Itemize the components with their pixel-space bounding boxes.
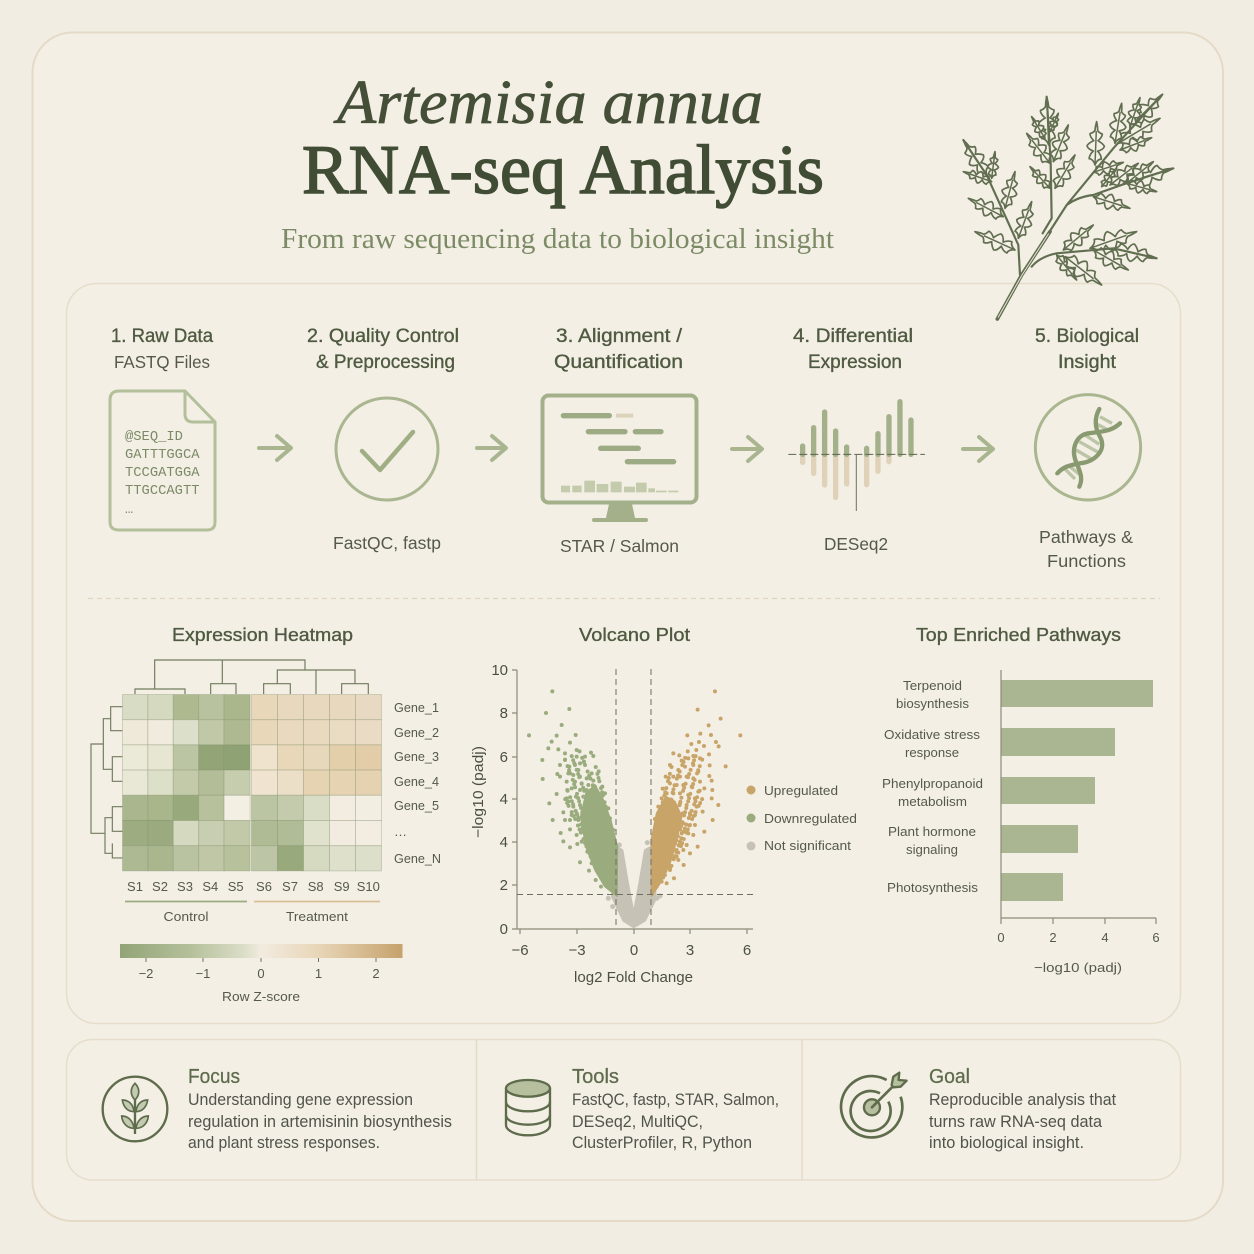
gene labels: Gene_3	[394, 749, 439, 764]
gene labels: Gene_4	[394, 774, 439, 789]
pathway labels: Oxidative stress	[884, 727, 981, 742]
goal block	[841, 1066, 1116, 1152]
tools block: FastQC, fastp, STAR, Salmon,	[572, 1091, 779, 1109]
volcano heading: Volcano Plot	[579, 624, 690, 645]
axis labels: −log10 (padj)	[470, 746, 487, 838]
icon: check circle	[336, 398, 438, 500]
icon: FASTQ file: …	[125, 503, 133, 518]
arrow 1 to 2	[259, 436, 291, 460]
legend: Upregulated	[764, 783, 838, 798]
sample labels: S8	[308, 879, 324, 894]
axis labels: 10	[491, 662, 508, 679]
scatter points	[529, 691, 740, 927]
step 5: biological insight	[1035, 326, 1141, 571]
pathway labels: Plant hormone	[888, 824, 976, 839]
icon: artemisia sprig	[956, 88, 1176, 319]
step 4: differential expression: DESeq2	[824, 534, 888, 554]
x axis labels: 2	[1049, 930, 1057, 945]
group labels	[125, 902, 380, 924]
volcano plot	[470, 662, 857, 986]
axis labels: 6	[500, 749, 508, 766]
x axis labels: 4	[1101, 930, 1109, 945]
tools block: DESeq2, MultiQC,	[572, 1113, 703, 1131]
goal block: Goal	[929, 1066, 970, 1088]
color scale: −2	[139, 966, 153, 981]
arrow 2 to 3	[477, 436, 506, 460]
step 1: raw data: 1. Raw Data	[111, 326, 213, 347]
goal block: turns raw RNA-seq data	[929, 1113, 1103, 1131]
pathway labels: Phenylpropanoid	[882, 776, 983, 791]
axis labels: −3	[568, 942, 586, 959]
sample labels: S3	[177, 879, 193, 894]
icon: DNA helix	[1035, 395, 1141, 500]
heatmap cells	[122, 694, 382, 871]
gene labels: Gene_2	[394, 725, 439, 740]
gene labels	[394, 700, 441, 866]
axis labels: 0	[500, 921, 508, 938]
focus block: and plant stress responses.	[188, 1134, 380, 1152]
step 5: biological insight: 5. Biological	[1035, 326, 1139, 347]
tools block: ClusterProfiler, R, Python	[572, 1134, 752, 1152]
axis labels: 2	[500, 877, 508, 894]
tools block	[506, 1066, 779, 1152]
panel: summary	[66, 1040, 1180, 1180]
step 3: alignment: STAR / Salmon	[560, 536, 679, 556]
icon: FASTQ file: @SEQ_ID	[125, 429, 183, 445]
axis labels: −6	[511, 942, 529, 959]
icon: FASTQ file: GATTTGGCA	[125, 448, 200, 463]
sample labels: S7	[282, 879, 298, 894]
axis labels: log2 Fold Change	[574, 969, 693, 986]
step 2: quality control	[307, 326, 459, 553]
sample labels	[127, 879, 380, 894]
color scale	[120, 944, 402, 1004]
step 3: alignment	[542, 326, 696, 556]
tools block: Tools	[572, 1066, 619, 1088]
icon: FASTQ file	[110, 391, 215, 530]
pathway labels: response	[905, 745, 959, 760]
axis labels: 4	[500, 791, 508, 808]
axis labels: 8	[500, 705, 508, 722]
color scale: −1	[196, 966, 210, 981]
x axis labels	[997, 930, 1160, 975]
step 4: differential expression: 4. Differential	[793, 326, 913, 347]
step 5: biological insight: Pathways &	[1039, 527, 1133, 547]
axis labels	[470, 662, 751, 986]
heatmap heading: Expression Heatmap	[172, 624, 353, 645]
focus block: Focus	[188, 1066, 240, 1088]
panel: pipeline and charts	[66, 284, 1180, 1024]
sample labels: S6	[256, 879, 272, 894]
pathway labels	[882, 678, 983, 895]
icon: FASTQ file: TCCGATGGA	[125, 466, 200, 481]
axis labels: 3	[686, 942, 694, 959]
color scale: 2	[372, 966, 380, 981]
pathway labels: Photosynthesis	[887, 880, 979, 895]
dendrograms	[91, 660, 368, 858]
icon: FASTQ file: TTGCCAGTT	[125, 484, 200, 499]
focus block: regulation in artemisinin biosynthesis	[188, 1113, 452, 1131]
icon: plant circle	[103, 1077, 167, 1141]
axis labels: 0	[630, 942, 638, 959]
x axis labels: −log10 (padj)	[1034, 960, 1122, 975]
step 5: biological insight: Functions	[1047, 551, 1126, 571]
axes and thresholds	[512, 669, 754, 934]
sample labels: S2	[152, 879, 168, 894]
step 3: alignment: Quantification	[554, 352, 683, 373]
expression heatmap	[91, 660, 441, 1004]
step 1: raw data	[110, 326, 215, 530]
group labels: Treatment	[286, 909, 348, 924]
pathway labels: metabolism	[898, 794, 967, 809]
bars	[1001, 680, 1153, 901]
sample labels: S10	[357, 879, 380, 894]
sample labels: S4	[202, 879, 218, 894]
arrow 3 to 4	[732, 437, 762, 461]
legend	[746, 783, 857, 853]
pathways heading: Top Enriched Pathways	[916, 624, 1121, 645]
arrow 4 to 5	[963, 437, 993, 461]
pathway labels: signaling	[906, 842, 958, 857]
axis labels: 6	[743, 942, 751, 959]
icon: expression bars	[788, 402, 925, 511]
title	[302, 69, 824, 209]
goal block: Reproducible analysis that	[929, 1091, 1116, 1109]
icon: target with arrow	[841, 1073, 907, 1137]
sample labels: S5	[228, 879, 244, 894]
color scale: 1	[315, 966, 322, 981]
sample labels: S9	[334, 879, 350, 894]
legend: Not significant	[764, 838, 851, 853]
step 3: alignment: 3. Alignment /	[556, 326, 683, 347]
step 2: quality control: & Preprocessing	[316, 352, 455, 373]
step 2: quality control: FastQC, fastp	[333, 533, 441, 553]
sample labels: S1	[127, 879, 143, 894]
step 4: differential expression: Expression	[808, 352, 902, 373]
step 2: quality control: 2. Quality Control	[307, 326, 459, 347]
pathway labels: Terpenoid	[903, 678, 962, 693]
legend: Downregulated	[764, 811, 857, 826]
gene labels: Gene_1	[394, 700, 439, 715]
x axis labels: 6	[1152, 930, 1160, 945]
icon: database	[506, 1080, 550, 1135]
gene labels: …	[394, 824, 407, 839]
focus block: Understanding gene expression	[188, 1091, 413, 1109]
focus block	[103, 1066, 452, 1152]
step 1: raw data: FASTQ Files	[114, 352, 210, 372]
pathway bar chart	[882, 670, 1160, 975]
color scale: Row Z-score	[222, 989, 300, 1004]
color scale: 0	[257, 966, 265, 981]
axis labels: 4	[500, 834, 508, 851]
title: Artemisia annua	[333, 69, 763, 137]
group labels: Control	[164, 909, 209, 924]
pathway labels: biosynthesis	[896, 696, 970, 711]
step 5: biological insight: Insight	[1058, 352, 1117, 373]
x axis labels: 0	[997, 930, 1005, 945]
subtitle: From raw sequencing data to biological insight	[281, 223, 834, 255]
gene labels: Gene_5	[394, 798, 439, 813]
title: RNA-seq Analysis	[302, 132, 824, 209]
icon: monitor with read alignments	[542, 396, 696, 522]
goal block: into biological insight.	[929, 1134, 1084, 1152]
step 4: differential expression	[788, 326, 925, 554]
gene labels: Gene_N	[394, 851, 441, 866]
